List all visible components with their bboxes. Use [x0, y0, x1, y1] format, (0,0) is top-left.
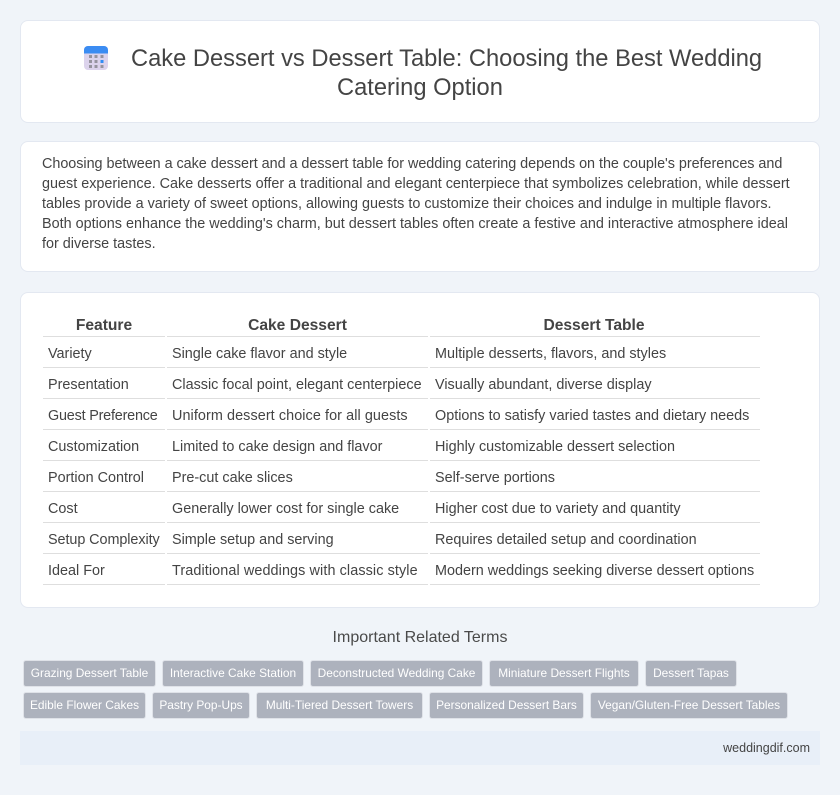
comparison table [43, 317, 760, 585]
related terms tags: Grazing Dessert Table [31, 666, 148, 680]
comparison table: Generally lower cost for single cake [172, 501, 399, 517]
panel: title header [20, 20, 820, 123]
comparison table: Uniform dessert choice for all guests [172, 408, 408, 424]
comparison table: Single cake flavor and style [172, 346, 347, 362]
comparison table: Higher cost due to variety and quantity [435, 501, 681, 517]
comparison table: Requires detailed setup and coordination [435, 532, 697, 548]
related terms tags: Edible Flower Cakes [30, 698, 139, 712]
related terms tags [23, 660, 788, 719]
comparison table: Setup Complexity [48, 532, 160, 548]
comparison table: Highly customizable dessert selection [435, 439, 675, 455]
comparison table: Variety [48, 346, 92, 362]
related terms tags: Dessert Tapas [653, 666, 729, 680]
comparison table: Guest Preference [48, 408, 158, 424]
footer bar [20, 731, 820, 765]
panel: introduction [20, 141, 820, 272]
related terms tags: Miniature Dessert Flights [498, 666, 630, 680]
panel: comparison table card [20, 292, 820, 608]
comparison table: Traditional weddings with classic style [172, 563, 418, 579]
comparison table: Multiple desserts, flavors, and styles [435, 346, 666, 362]
comparison table: Visually abundant, diverse display [435, 377, 652, 393]
text block: introduction: guest experience. Cake desserts offer a traditional and elegant centerpiece that symbolizes celebration, while dessert [42, 176, 790, 192]
title: Catering Option [337, 75, 503, 101]
comparison table: Pre-cut cake slices [172, 470, 293, 486]
comparison table: Simple setup and serving [172, 532, 334, 548]
text block: introduction: Both options enhance the wedding's charm, but dessert tables often create a festive and interactive atmosphere ideal [42, 216, 788, 232]
text block: introduction: Choosing between a cake dessert and a dessert table for wedding catering depends on the couple's preferences and [42, 156, 782, 172]
comparison table: Customization [48, 439, 139, 455]
comparison table: Classic focal point, elegant centerpiece [172, 377, 422, 393]
title [131, 46, 762, 101]
comparison table: Cost [48, 501, 78, 517]
icon: calendar [84, 46, 108, 70]
comparison table: Self-serve portions [435, 470, 555, 486]
footer source text: weddingdif.com [723, 741, 810, 755]
related terms tags: Vegan/Gluten-Free Dessert Tables [598, 698, 780, 712]
related terms tags: Multi-Tiered Dessert Towers [266, 698, 413, 712]
text block: introduction: for diverse tastes. [42, 236, 156, 252]
text block: introduction [42, 156, 790, 252]
comparison table: Ideal For [48, 563, 105, 579]
comparison table: Cake Dessert [248, 317, 347, 334]
related terms tags: Deconstructed Wedding Cake [318, 666, 475, 680]
related terms tags: Interactive Cake Station [170, 666, 296, 680]
comparison table: Feature [76, 317, 132, 334]
comparison table: Modern weddings seeking diverse dessert options [435, 563, 754, 579]
related terms tags: Pastry Pop-Ups [159, 698, 243, 712]
comparison table: Presentation [48, 377, 129, 393]
comparison table: Dessert Table [543, 317, 645, 334]
text block: introduction: tables provide a variety of sweet options, allowing guests to customize their choices and indulge in multiple flavors. [42, 196, 772, 212]
comparison table: Limited to cake design and flavor [172, 439, 382, 455]
comparison table: Options to satisfy varied tastes and dietary needs [435, 408, 749, 424]
comparison table: Portion Control [48, 470, 144, 486]
related terms tags: Personalized Dessert Bars [436, 698, 577, 712]
title: Cake Dessert vs Dessert Table: Choosing the Best Wedding [131, 46, 762, 72]
heading: important related terms: Important Related Terms [333, 629, 507, 646]
